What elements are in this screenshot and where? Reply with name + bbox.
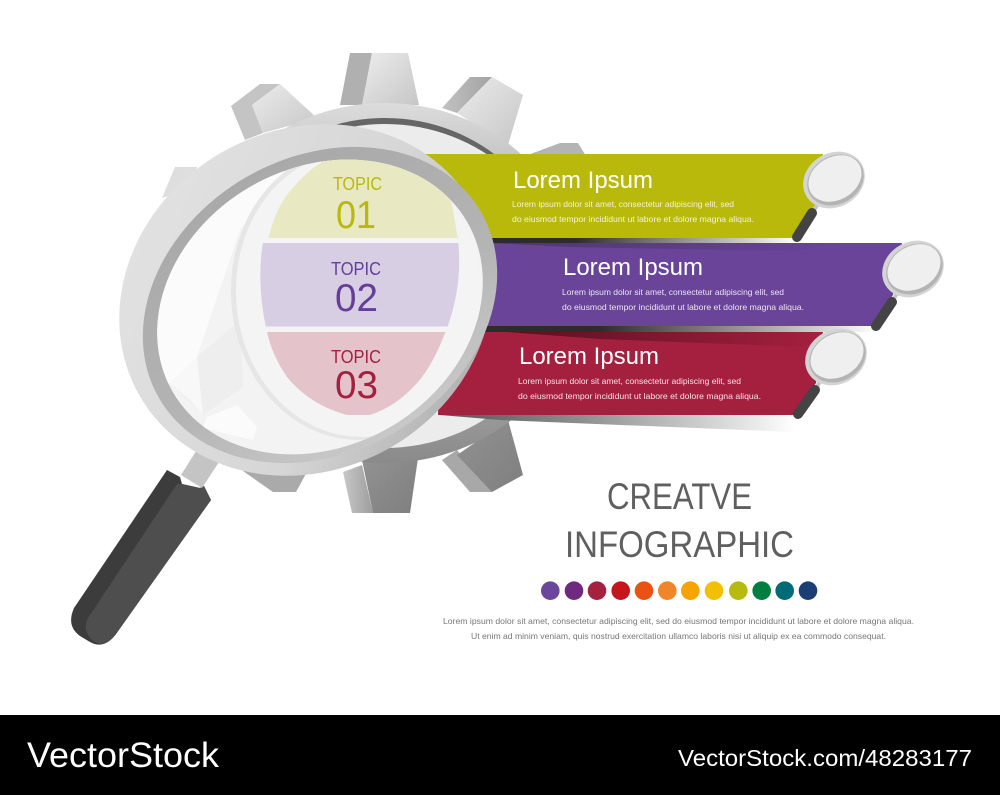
body text: Lorem ipsum dolor sit amet, consectetur adipiscing elit, sed do eiusmod tempor incididunt ut labore et dolore magna aliqua. — [443, 616, 914, 626]
magnifier handle — [71, 470, 211, 645]
text: red banner description — [518, 376, 761, 401]
icon: mini magnifier 2 — [872, 230, 954, 326]
text: yellow banner description: do eiusmod tempor incididunt ut labore et dolore magna aliqua. — [512, 214, 754, 224]
colour dots — [541, 581, 817, 600]
title: CREATVE — [607, 476, 752, 517]
topic 01 label: TOPIC — [333, 174, 382, 194]
body text: Ut enim ad minim veniam, quis nostrud exercitation ullamco laboris nisi ut aliquip ex ea commodo consequat. — [471, 631, 886, 641]
title — [565, 476, 794, 565]
banner shadow under purple — [480, 326, 878, 332]
title: INFOGRAPHIC — [565, 524, 794, 565]
panel: red banner — [438, 332, 823, 415]
heading: red banner: Lorem Ipsum — [519, 343, 659, 370]
banner shadow under red — [440, 415, 796, 432]
topic 01 label — [333, 174, 382, 237]
panel: purple banner — [470, 243, 902, 326]
topic circle — [255, 150, 467, 417]
footer image id: VectorStock.com/48283177 — [678, 745, 972, 771]
text: red banner description: Lorem ipsum dolor sit amet, consectetur adipiscing elit, sed — [518, 376, 741, 386]
topic 03 label — [331, 347, 381, 407]
gear — [162, 53, 586, 513]
icon: large magnifier — [71, 124, 498, 645]
topic 03 label: TOPIC — [331, 347, 381, 367]
topic 02 label: 02 — [335, 277, 378, 320]
text: purple banner description: do eiusmod tempor incididunt ut labore et dolore magna aliqua. — [562, 302, 804, 312]
text: purple banner description — [562, 287, 804, 312]
heading: purple banner: Lorem Ipsum — [563, 254, 703, 281]
heading: yellow banner: Lorem Ipsum — [513, 167, 653, 194]
magnifier neck — [181, 448, 219, 488]
banner shadow under yellow — [480, 238, 796, 243]
text: red banner description: do eiusmod tempor incididunt ut labore et dolore magna aliqua. — [518, 391, 761, 401]
icon: mini magnifier 1 — [793, 141, 875, 237]
topic 03 label: 03 — [335, 364, 378, 407]
body text — [443, 616, 914, 641]
panel: yellow banner — [400, 154, 823, 238]
magnifier inner rim — [85, 84, 555, 526]
icon: mini magnifier 3 — [795, 318, 877, 414]
footer bar — [0, 715, 1000, 795]
text: yellow banner description: Lorem ipsum dolor sit amet, consectetur adipiscing elit, sed — [512, 199, 734, 209]
footer logo: VectorStock — [27, 736, 220, 775]
lens inner ring — [231, 166, 370, 440]
topic 02 label: TOPIC — [331, 259, 381, 279]
topic 02 label — [331, 259, 381, 320]
text: purple banner description: Lorem ipsum dolor sit amet, consectetur adipiscing elit, sed — [562, 287, 784, 297]
magnifier outer rim — [55, 57, 557, 543]
text: yellow banner description — [512, 199, 754, 224]
topic 01 label: 01 — [336, 194, 376, 237]
magnifier lens — [157, 160, 483, 454]
